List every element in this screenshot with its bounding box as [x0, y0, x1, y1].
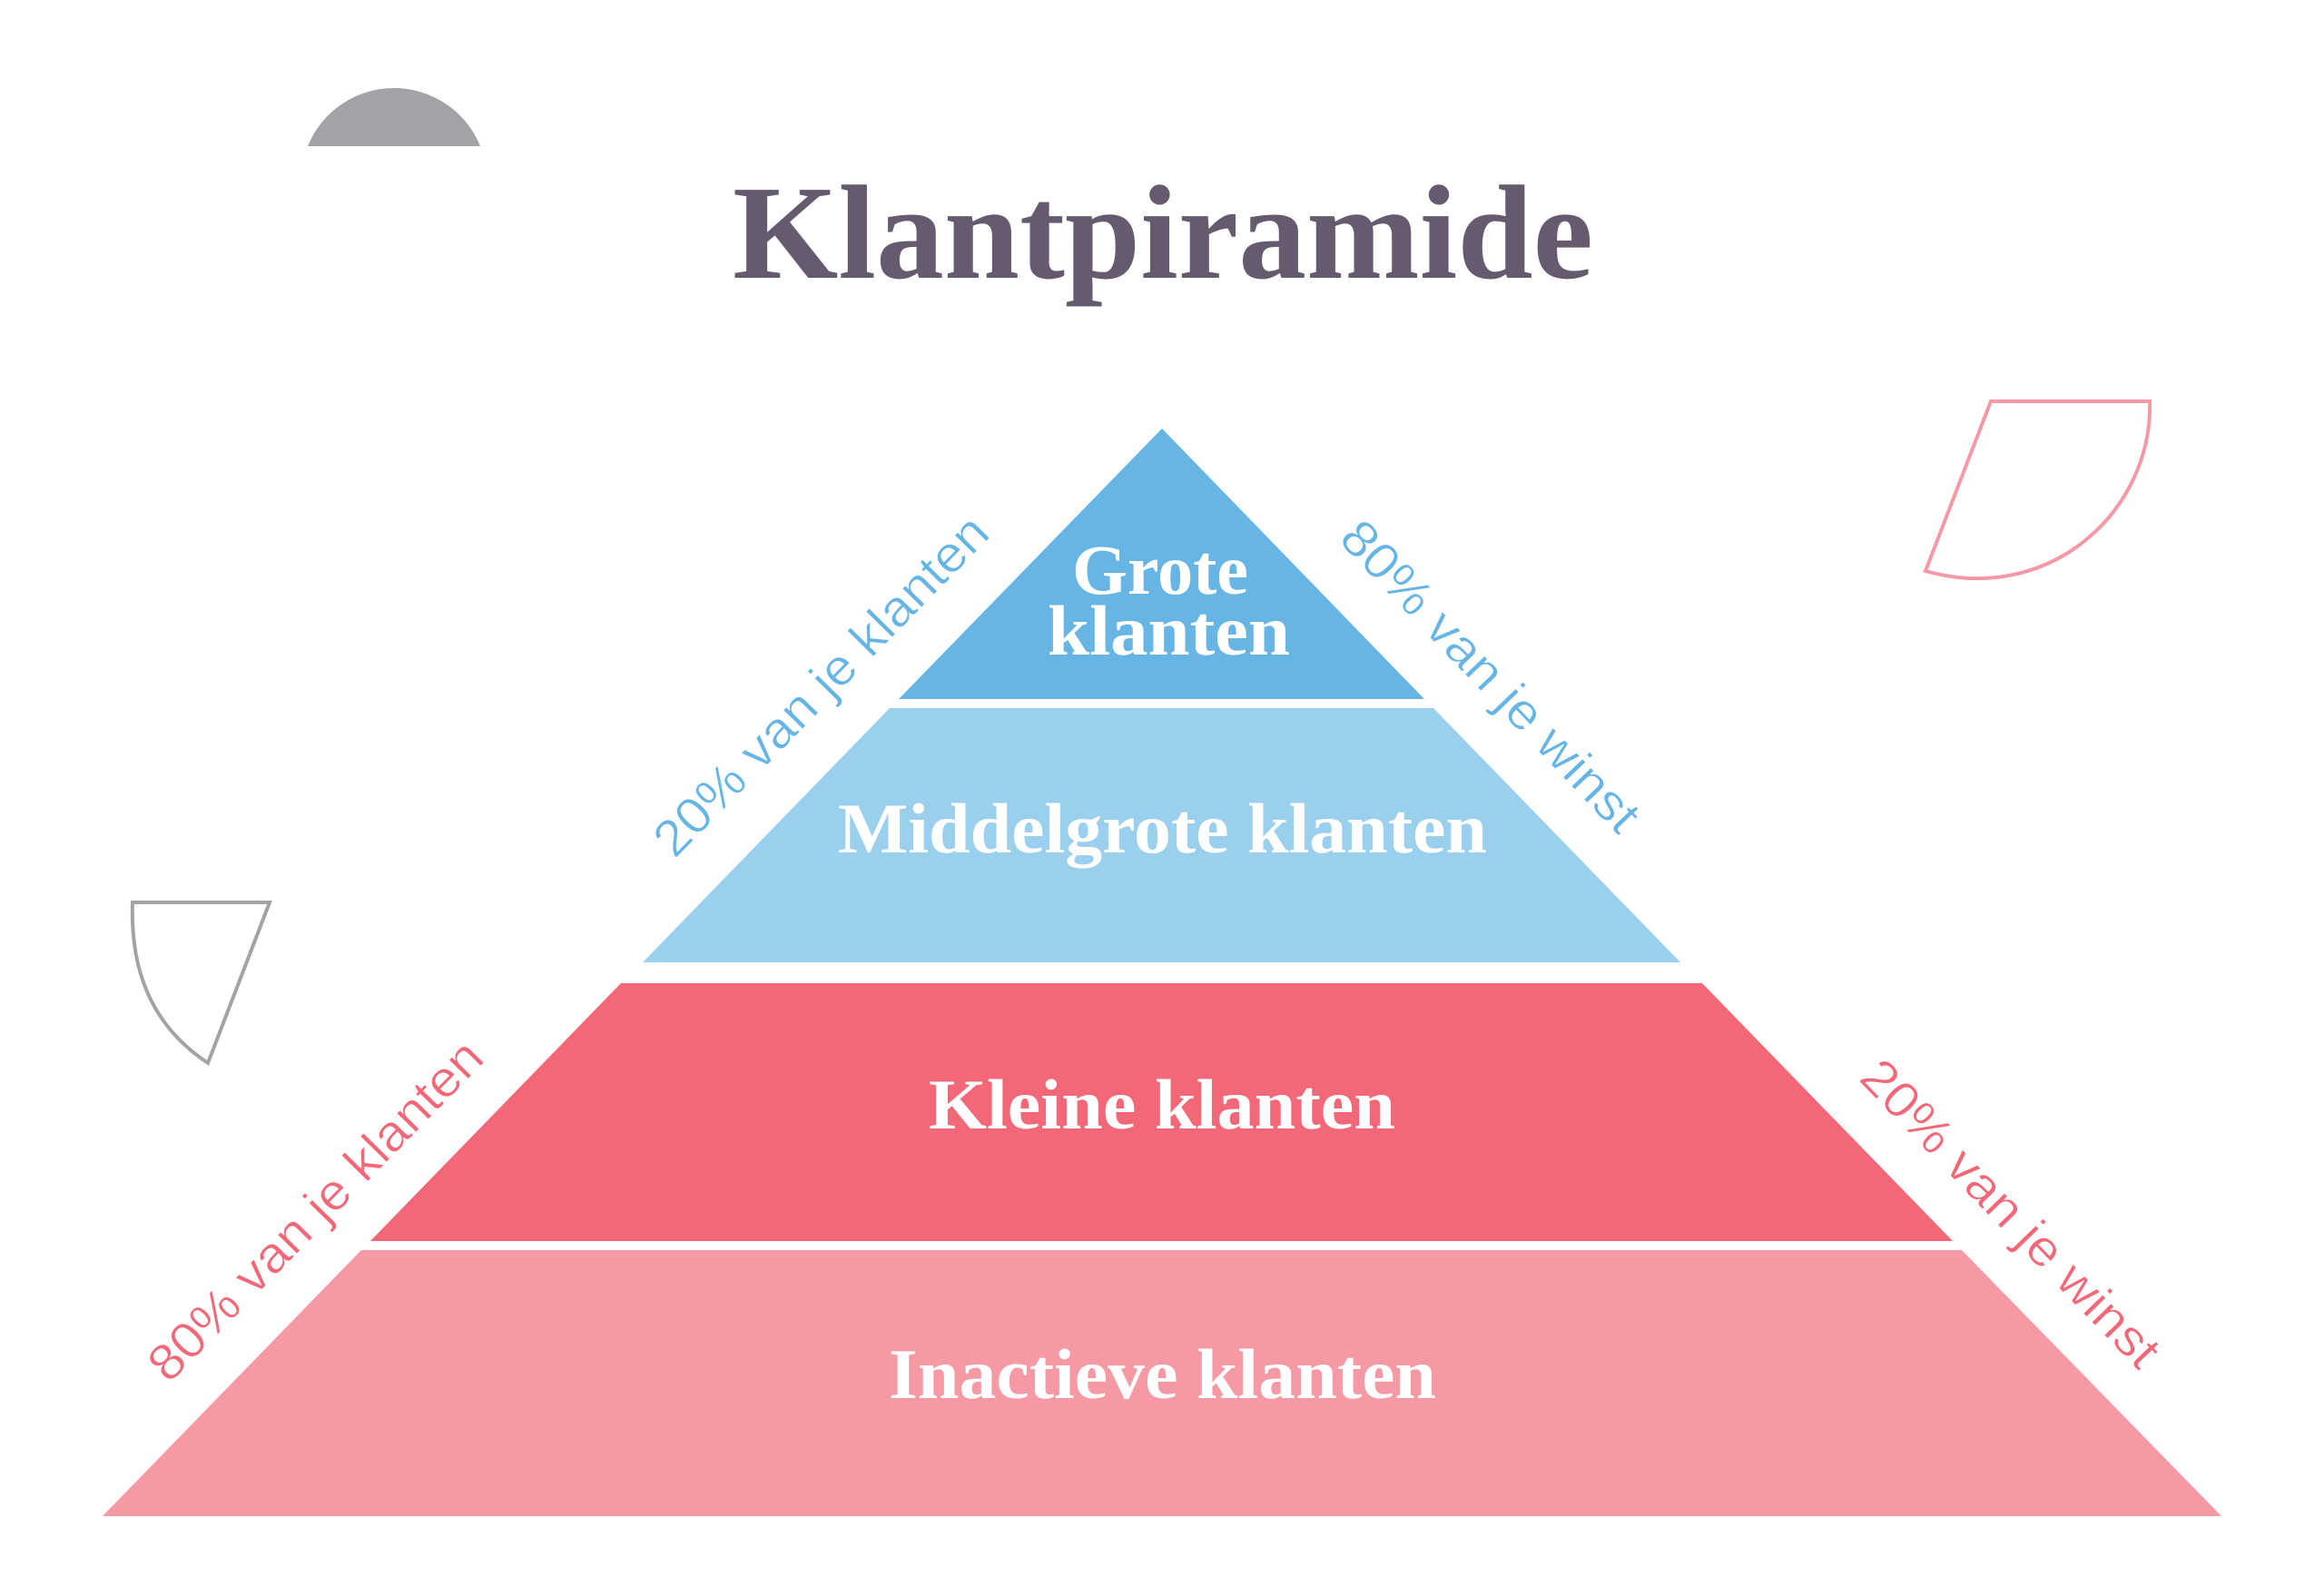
side label: 20% van je winst: 20% van je winst: [1849, 1048, 2173, 1379]
icon: pink outlined sector: [1925, 401, 2150, 578]
pyramid tier: grote klanten: Grote: [1072, 530, 1248, 609]
side label: 80% van je winst: 80% van je winst: [1329, 508, 1653, 843]
pyramid tier: kleine klanten: Kleine klanten: [929, 1065, 1395, 1144]
title: Klantpiramide: [733, 159, 1593, 308]
pyramid tier: middelgrote klanten: [643, 708, 1680, 962]
pyramid: [103, 429, 2221, 1516]
pyramid tier: grote klanten: klanten: [1048, 591, 1290, 670]
pyramid tier: middelgrote klanten: Middelgrote klanten: [838, 789, 1487, 868]
side label: 80% van je klanten: 80% van je klanten: [136, 1028, 494, 1392]
icon: grey semicircle: [308, 88, 480, 146]
side label: 20% van je klanten: 20% van je klanten: [642, 503, 1000, 867]
icon: grey outlined sector: [133, 902, 270, 1063]
pyramid tier: grote klanten: [899, 429, 1424, 699]
pyramid tier: inactieve klanten: [103, 1250, 2221, 1516]
pyramid tier: inactieve klanten: Inactieve klanten: [889, 1335, 1436, 1414]
pyramid tier: kleine klanten: [370, 983, 1953, 1241]
